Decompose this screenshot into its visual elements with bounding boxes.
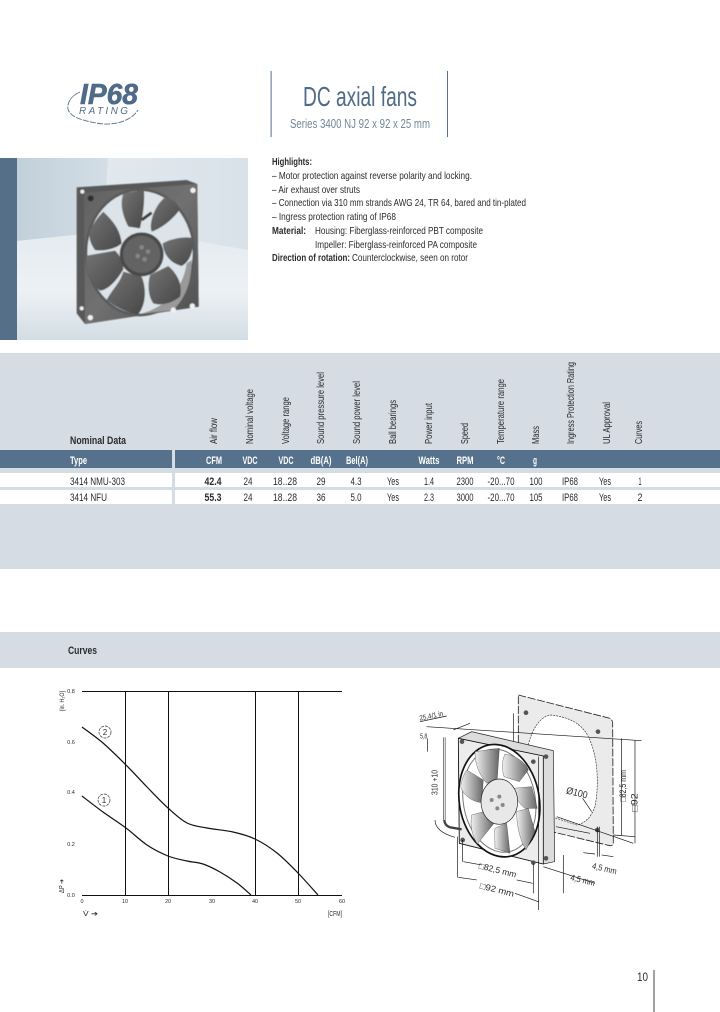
curve 2	[82, 727, 318, 895]
header row: VDC	[278, 455, 294, 467]
axis labels	[67, 689, 345, 905]
highlights text block: Counterclockwise, seen on rotor	[352, 252, 468, 264]
axis labels: 0.4	[67, 790, 75, 796]
rotated column headers: Air flow	[208, 418, 220, 444]
subtitle: Series 3400 NJ 92 x 92 x 25 mm	[290, 116, 430, 131]
dimension labels: 4,5 mm	[569, 872, 596, 888]
header row: Type	[70, 455, 87, 467]
data row 2: 5.0	[350, 492, 362, 504]
fan performance chart	[59, 689, 345, 918]
strands	[444, 737, 462, 829]
rotated column headers: Mass	[530, 426, 542, 444]
data row 2: -20...70	[488, 492, 514, 504]
logo: IP68 rating	[68, 79, 139, 124]
inner ring strip	[140, 260, 192, 314]
data row 2: 24	[244, 492, 252, 504]
dimension labels: □82,5 mm	[478, 861, 517, 880]
data row 1	[70, 476, 642, 488]
header row: CFM	[206, 455, 222, 467]
rotated column headers: Nominal voltage	[244, 389, 256, 444]
axis labels: 0	[80, 899, 84, 905]
logo: IP68 rating: IP68	[80, 79, 139, 111]
rotated column headers: Power input	[423, 403, 435, 444]
product photo	[17, 158, 248, 340]
dimension labels: 5,8	[420, 732, 427, 741]
header row	[70, 455, 537, 467]
title: DC axial fans	[303, 81, 417, 112]
curve labels	[98, 726, 111, 806]
axis labels: 0.6	[67, 740, 75, 746]
curve labels: 2	[103, 728, 108, 737]
highlights text block: – Air exhaust over struts	[272, 184, 360, 196]
axis labels: 50	[295, 899, 301, 905]
dimension labels: □82,5 mm	[618, 770, 628, 802]
nominal data table	[0, 353, 720, 569]
dimension labels: 310 +10	[429, 770, 439, 795]
wire	[142, 213, 152, 220]
data row 2: 18..28	[273, 492, 297, 504]
page number: 10	[637, 970, 648, 984]
dimension labels	[419, 709, 640, 899]
data row 2: Yes	[599, 492, 611, 504]
data row 1: 3414 NMU-303	[70, 476, 125, 488]
highlights text block: Housing: Fiberglass-reinforced PBT composite	[315, 225, 483, 237]
data row 1: 42.4	[204, 476, 222, 488]
blades	[475, 748, 499, 783]
highlights text block: – Connection via 310 mm strands AWG 24, TR 64, bared and tin-plated	[272, 197, 526, 209]
dimension labels: □92 mm	[479, 881, 515, 899]
data row 1: 4.3	[350, 476, 362, 488]
highlights text block: – Motor protection against reverse polarity and locking.	[272, 170, 472, 182]
header row: Watts	[418, 455, 440, 467]
data row 1: Yes	[387, 476, 399, 488]
highlights text block: Impeller: Fiberglass-reinforced PA composite	[315, 239, 477, 251]
logo: IP68 rating: RATING	[79, 106, 128, 117]
data row 1: IP68	[562, 476, 578, 488]
fan frame	[458, 732, 555, 864]
dimension labels: □92	[630, 793, 640, 812]
data row 2: IP68	[562, 492, 578, 504]
data row 1: -20...70	[488, 476, 514, 488]
header row: Bel(A)	[346, 455, 368, 467]
fan performance chart: [CFM]	[328, 911, 342, 918]
rotated column headers: Sound power level	[351, 381, 363, 444]
data row 1: 100	[530, 476, 542, 488]
rotated column headers: Voltage range	[280, 397, 292, 444]
header row: dB(A)	[310, 455, 332, 467]
data row 1: 24	[244, 476, 252, 488]
axis labels: 10	[122, 899, 128, 905]
data row 2	[70, 492, 642, 504]
rotated column headers	[208, 362, 645, 444]
curves heading: Curves	[68, 645, 97, 657]
axis labels: 20	[165, 899, 171, 905]
fan performance chart: ΔP ➔	[59, 879, 66, 893]
data row 2: 2	[638, 492, 642, 504]
data row 2: 3414 NFU	[70, 492, 107, 504]
rotated column headers: UL Approval	[601, 402, 613, 444]
hub	[481, 779, 518, 824]
dimension labels: 25,4/1 in	[419, 709, 444, 723]
axis labels: 0.8	[67, 689, 75, 695]
rotated column headers: Temperature range	[495, 379, 507, 444]
axis labels: 40	[252, 899, 258, 905]
dimension drawing	[419, 695, 642, 910]
axis labels: 30	[209, 899, 215, 905]
rotated column headers: Ingress Protection Rating	[565, 362, 577, 444]
fan performance chart: [in. H₂O]	[59, 691, 66, 711]
data row 2: 3000	[456, 492, 474, 504]
data row 2: 2.3	[424, 492, 434, 504]
header row: RPM	[456, 455, 474, 467]
plate opening	[528, 715, 597, 825]
dimension labels: 4,5 mm	[591, 861, 618, 876]
curve labels: 1	[102, 796, 107, 805]
data row 1: 29	[316, 476, 326, 488]
curves band	[0, 632, 720, 668]
header row: VDC	[242, 455, 258, 467]
data row 2: 105	[530, 492, 542, 504]
data row 1: 1.4	[424, 476, 434, 488]
highlights text block: Highlights:	[272, 156, 312, 168]
rotated column headers: Ball bearings	[387, 400, 399, 444]
data row 2: 36	[316, 492, 326, 504]
data row 1: 18..28	[273, 476, 297, 488]
highlights text block	[272, 156, 526, 264]
rotated column headers: Speed	[459, 423, 471, 444]
curve 1	[82, 796, 251, 895]
highlights text block: Direction of rotation:	[272, 252, 350, 264]
dimension labels: Ø100	[565, 786, 589, 802]
header row: °C	[497, 455, 505, 467]
data row 1: 2300	[456, 476, 474, 488]
data row 1: Yes	[599, 476, 611, 488]
blue side bar	[0, 158, 17, 340]
rotated column headers: Sound pressure level	[315, 372, 327, 444]
mounting plate	[518, 695, 613, 846]
highlights text block: Material:	[272, 225, 306, 237]
highlights text block: – Ingress protection rating of IP68	[272, 211, 396, 223]
header row: g	[533, 455, 537, 467]
page number	[637, 970, 654, 1012]
axis labels: 60	[339, 899, 345, 905]
axis labels: 0.0	[67, 893, 75, 899]
nominal data table: 1	[638, 476, 642, 488]
data row 2: 55.3	[204, 492, 222, 504]
rotated column headers: Curves	[633, 421, 645, 444]
fan performance chart: V̇ ➔	[83, 910, 98, 918]
axis labels: 0.2	[67, 842, 75, 848]
dimension lines	[420, 713, 642, 910]
table heading: Nominal Data	[70, 435, 127, 447]
data row 2: Yes	[387, 492, 399, 504]
